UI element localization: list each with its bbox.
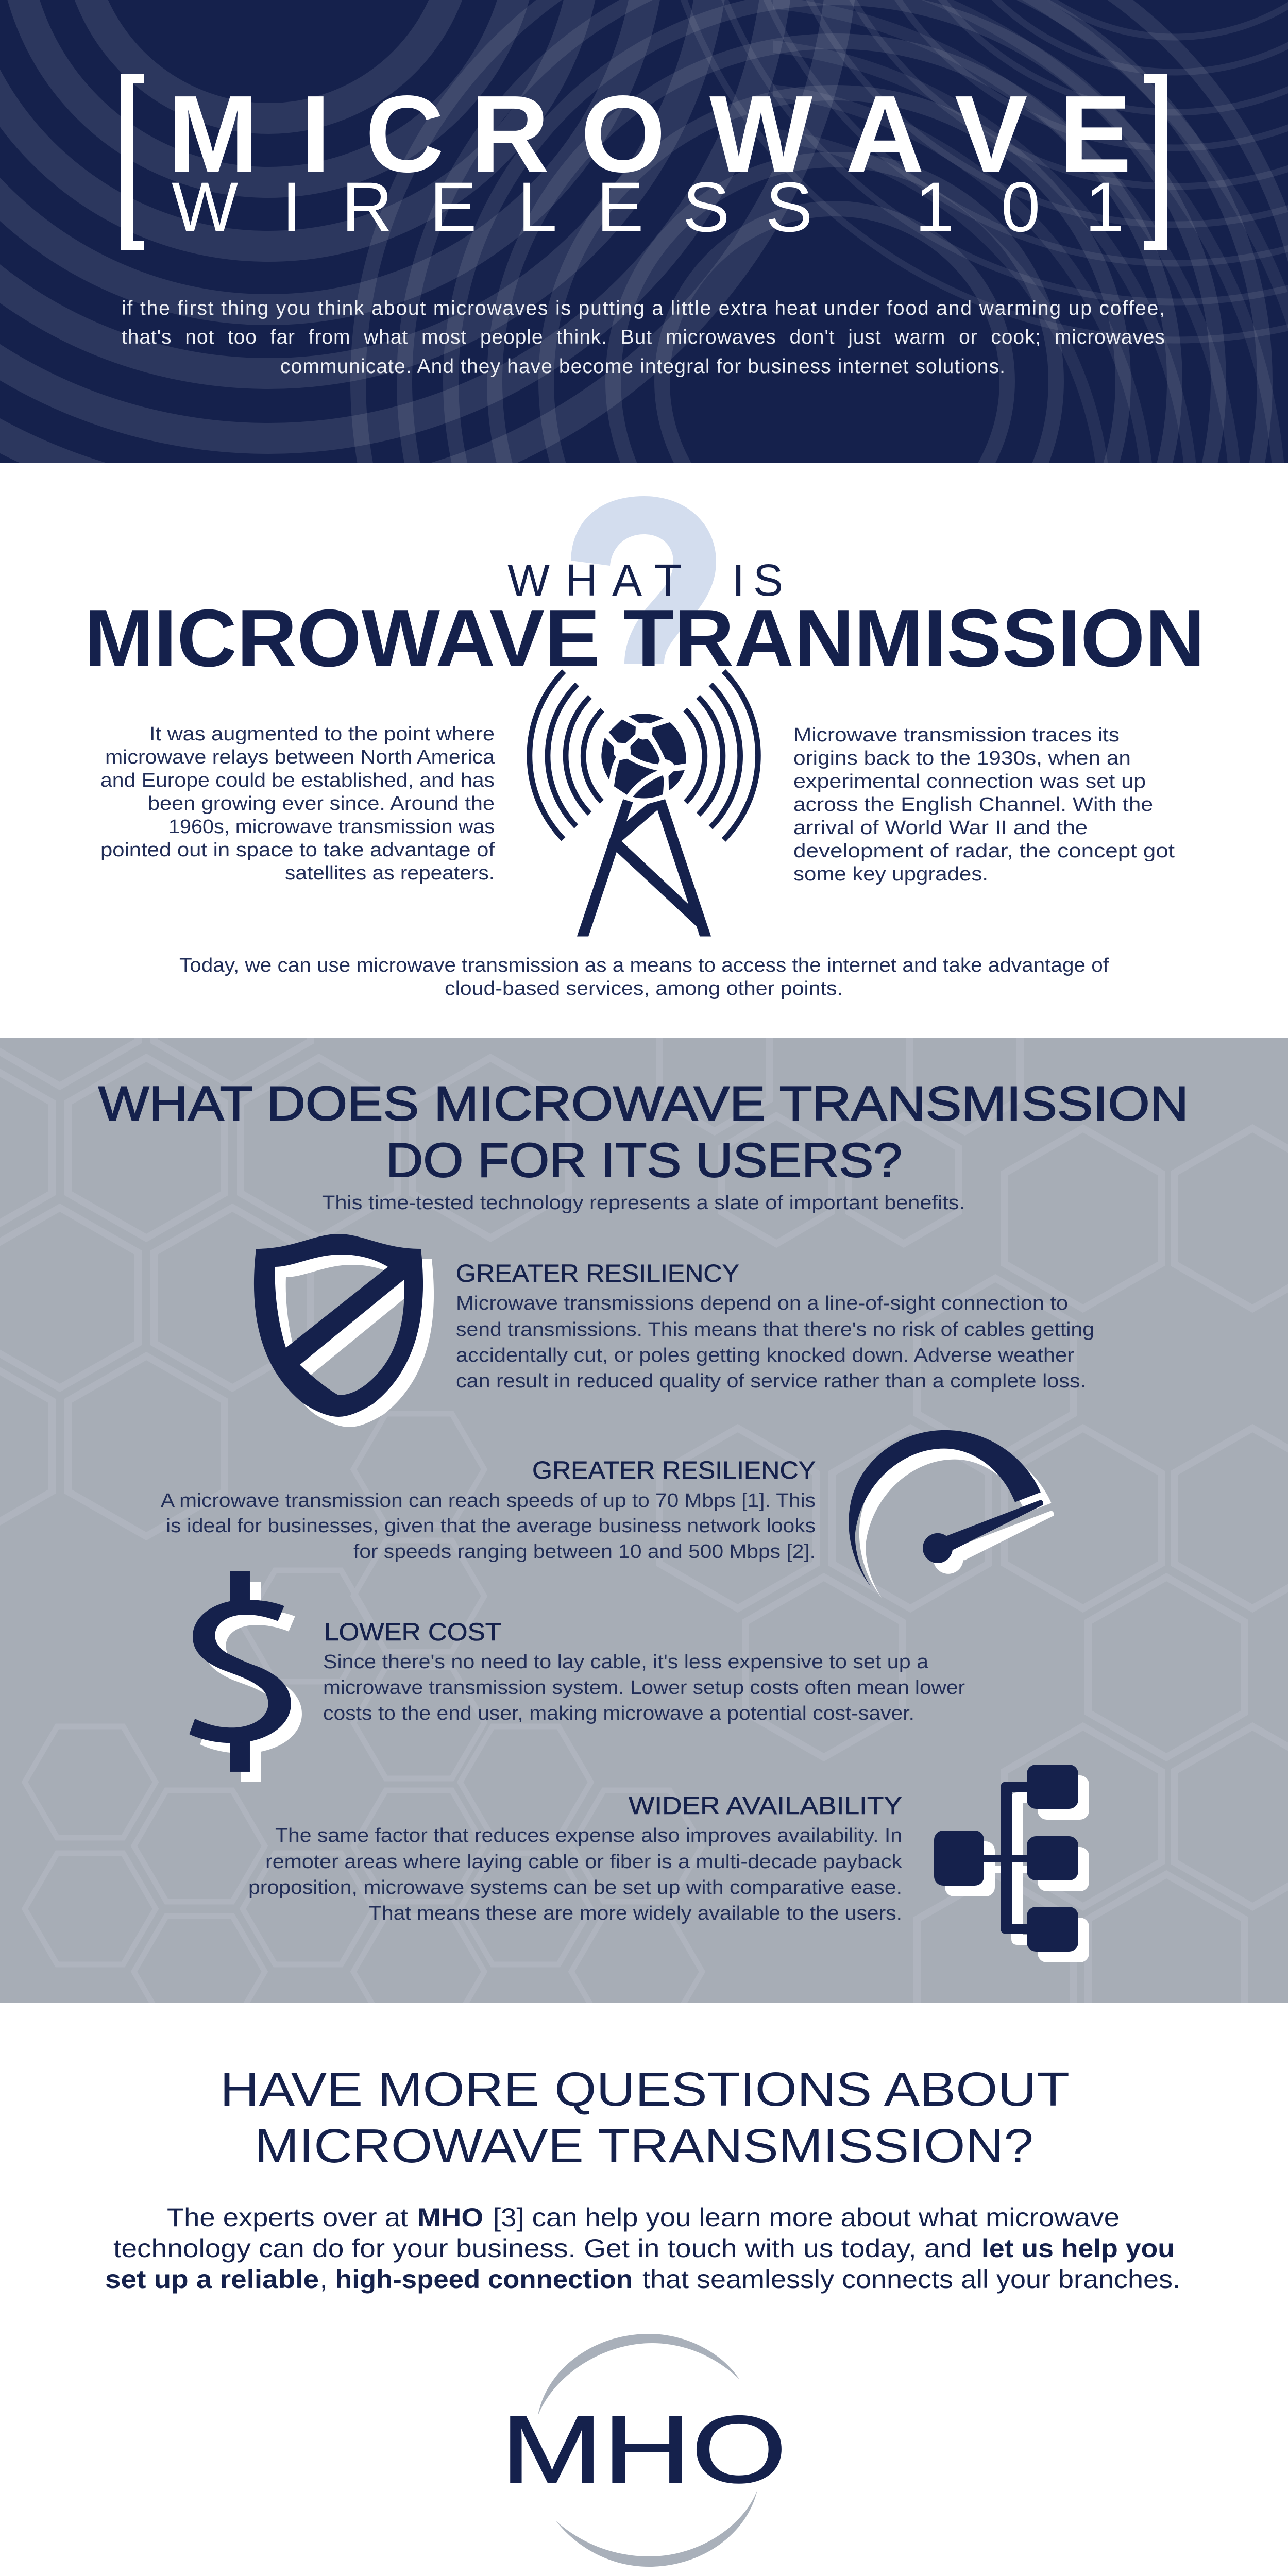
benefit: greater resiliency 2: is ideal for businesses, given that the average business network looks [166,1515,816,1537]
benefit: wider availability [248,1792,903,1924]
benefit: wider availability: proposition, microwave systems can be set up with comparative ease. [248,1877,902,1899]
benefit: wider availability: The same factor that reduces expense also improves availability. In [275,1825,902,1846]
text: benefits subtitle: This time-tested technology represents a slate of important benefits. [322,1192,965,1214]
icon: question mark backdrop [571,496,716,664]
text block: contact paragraph: let us help you [981,2234,1175,2263]
heading: microwave tranmission: MICROWAVE TRANMISSION [84,593,1205,684]
heading: what does microwave transmission do: WHAT DOES MICROWAVE TRANSMISSION [98,1076,1189,1130]
panel: call to action [105,2062,1180,2576]
heading: have more questions: MICROWAVE TRANSMISSION? [255,2119,1033,2173]
panel: what is microwave transmission [84,496,1205,999]
text block: left column: satellites as repeaters. [285,862,495,884]
benefit: wider availability: WIDER AVAILABILITY [629,1792,902,1820]
heading: have more questions [220,2062,1070,2173]
benefit: greater resiliency 1: can result in reduced quality of service rather than a complete loss. [456,1370,1086,1392]
text block: contact paragraph: technology can do for your business. Get in touch with us today, and [113,2234,972,2263]
text block: today: cloud-based services, among other points. [445,978,843,999]
heading: what does microwave transmission do [98,1076,1189,1187]
panel: hero banner [0,0,1288,463]
logo: MHO: MHO [501,2397,787,2503]
text block: right column: Microwave transmission traces its [793,724,1120,746]
text block: left column: microwave relays between North America [105,747,495,768]
icon: dollar sign [189,1571,302,1782]
icon: speed gauge [849,1430,1054,1598]
text block: right column: experimental connection was set up [793,771,1146,792]
benefit: greater resiliency 1 [456,1260,1094,1392]
benefit: greater resiliency 2: GREATER RESILIENCY [532,1457,816,1484]
text block: contact paragraph [105,2203,1180,2294]
text block: right column: development of radar, the concept got [793,840,1175,862]
benefit: lower cost: microwave transmission system. Lower setup costs often mean lower [323,1677,965,1699]
subtitle: wireless 101: WIRELESS 101 [172,168,1124,247]
benefit: greater resiliency 1: accidentally cut, or poles getting knocked down. Adverse weather [456,1345,1074,1366]
intro text: communicate. And they have become integral for business internet solutions. [280,355,1005,378]
benefit: lower cost [323,1619,965,1724]
text block: contact paragraph: set up a reliable [105,2265,319,2294]
text block: left column [100,723,495,884]
text block: contact paragraph: The experts over at [167,2203,408,2232]
text block: right column: arrival of World War II and the [793,817,1088,839]
text block: today: Today, we can use microwave transmission as a means to access the internet and take advantage of [179,955,1109,976]
text block: right column: origins back to the 1930s, when an [793,748,1131,769]
text block: right column: across the English Channel. With the [793,794,1153,816]
text block: right column [793,724,1175,885]
text block: contact paragraph: MHO [417,2203,483,2232]
benefit: lower cost: LOWER COST [324,1619,501,1646]
benefit: wider availability: That means these are more widely available to the users. [369,1903,902,1924]
text block: left column: and Europe could be established, and has [100,770,495,791]
heading: have more questions: HAVE MORE QUESTIONS ABOUT [220,2062,1070,2116]
text block: contact paragraph: , [320,2265,327,2294]
text block: contact paragraph: that seamlessly connects all your branches. [642,2265,1180,2294]
text block: left column: It was augmented to the point where [149,723,495,745]
benefit: greater resiliency 2 [161,1457,816,1563]
benefit: greater resiliency 2: for speeds ranging between 10 and 500 Mbps [2]. [353,1541,816,1563]
intro text: if the first thing you think about microwaves is putting a little extra heat under food and warming up coffee, [122,297,1165,319]
text block: left column: been growing ever since. Around the [148,793,495,815]
benefit: greater resiliency 1: Microwave transmissions depend on a line-of-sight connection to [456,1293,1068,1314]
text block: left column: 1960s, microwave transmission was [168,816,495,838]
intro text [122,297,1165,378]
benefit: greater resiliency 2: A microwave transmission can reach speeds of up to 70 Mbps [1]. This [161,1490,816,1512]
icon: network tree [934,1765,1089,1962]
title bracket right [1144,74,1167,250]
benefit: greater resiliency 1: send transmissions. This means that there's no risk of cables getting [456,1319,1094,1341]
benefit: lower cost: costs to the end user, making microwave a potential cost-saver. [323,1703,914,1724]
icon: radio tower with globe [530,671,758,937]
panel: benefits [0,1038,1288,2003]
benefit: greater resiliency 1: GREATER RESILIENCY [456,1260,739,1287]
intro text: that's not too far from what most people think. But microwaves don't just warm or cook; microwaves [122,326,1165,348]
title bracket left [121,74,144,250]
heading: what does microwave transmission do: DO FOR ITS USERS? [386,1133,902,1187]
benefit: wider availability: remoter areas where laying cable or fiber is a multi-decade payback [265,1851,903,1873]
title: microwave: MICROWAVE [167,73,1131,195]
text block: contact paragraph: [3] can help you learn more about what microwave [493,2203,1120,2232]
logo: MHO [501,2334,787,2567]
text block: left column: pointed out in space to take advantage of [100,839,495,861]
heading: what is: WHAT IS [507,555,783,605]
benefit: lower cost: Since there's no need to lay cable, it's less expensive to set up a [323,1651,929,1673]
text block: right column: some key upgrades. [793,863,988,885]
text block: today [179,955,1109,999]
icon: shield [254,1234,434,1427]
text block: contact paragraph: high-speed connection [335,2265,633,2294]
